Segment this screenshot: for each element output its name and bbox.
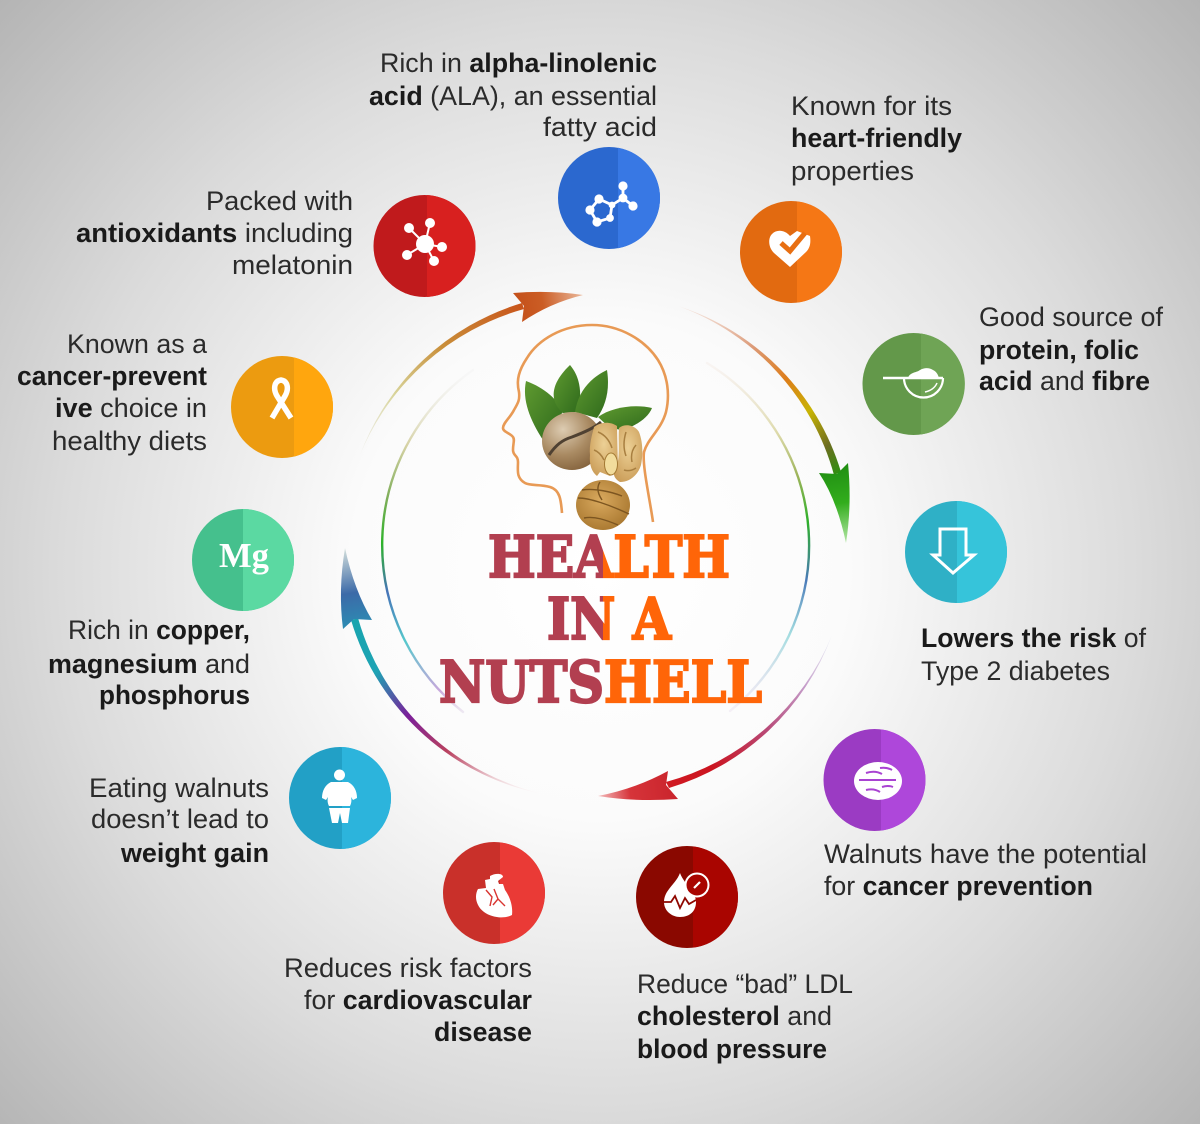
text: antioxidants [76, 186, 353, 280]
head outline [503, 325, 668, 522]
text: cardiovascular disease: for cardiovascular [304, 985, 532, 1015]
title: Health in a Nutshell [439, 524, 762, 716]
text: weight gain: weight gain [120, 838, 269, 868]
icon: walnut [824, 729, 926, 831]
cycle arrow: bottom right [598, 635, 832, 800]
icon: anatomical heart [443, 842, 545, 944]
text: type 2 diabetes [921, 623, 1146, 686]
text: type 2 diabetes: Lowers the risk of [921, 623, 1146, 653]
text: protein, folic acid and fibre [979, 302, 1163, 396]
text: copper, magnesium, phosphorus: Rich in copper, [68, 615, 250, 645]
text: cancer-preventive [17, 329, 208, 456]
text: protein, folic acid and fibre: acid and fibre [979, 366, 1150, 396]
text: alpha-linolenic acid [369, 48, 657, 142]
text: heart-friendly: Known for its [791, 91, 952, 121]
inner ring [382, 363, 809, 712]
central illustration: head with walnuts [503, 325, 668, 530]
text: cancer-preventive: healthy diets [52, 426, 207, 456]
text: copper, magnesium, phosphorus: magnesium and [48, 649, 250, 679]
text: antioxidants: Packed with [206, 186, 353, 216]
text: LDL cholesterol: cholesterol and [637, 1001, 832, 1031]
title: Health in a Nutshell: NUTSHELL [439, 649, 762, 716]
text: cancer prevention: Walnuts have the potential [824, 839, 1147, 869]
cycle arrow: top left [360, 292, 583, 455]
text: cancer prevention: for cancer prevention [824, 871, 1093, 901]
text: cardiovascular disease: disease [434, 1017, 532, 1047]
text: alpha-linolenic acid: fatty acid [543, 112, 657, 142]
whole walnut [576, 480, 630, 530]
text: type 2 diabetes: Type 2 diabetes [921, 656, 1110, 686]
icon: blood drop with gauge [636, 846, 738, 948]
icon: awareness ribbon [231, 356, 333, 458]
text: copper, magnesium, phosphorus [48, 615, 250, 710]
icon: overweight figure [289, 747, 391, 849]
icon: molecule [558, 147, 660, 249]
title: Health in a Nutshell: HEALTH [488, 524, 730, 591]
text: weight gain [89, 773, 269, 868]
text: alpha-linolenic acid: Rich in alpha-linolenic [380, 48, 657, 78]
leaves [525, 365, 652, 440]
text: heart-friendly: properties [791, 156, 914, 186]
text: heart-friendly [791, 91, 962, 186]
icon: Mg mineral: Mg [219, 536, 269, 575]
icon: heart with check [740, 201, 842, 303]
text: weight gain: doesn’t lead to [91, 804, 269, 834]
text: cancer-preventive: Known as a [67, 329, 208, 359]
text: antioxidants: melatonin [232, 250, 353, 280]
icon: Mg mineral [192, 509, 294, 611]
walnut kernel [590, 423, 642, 482]
text: protein, folic acid and fibre: protein, folic [979, 335, 1139, 365]
text: copper, magnesium, phosphorus: phosphorus [99, 680, 250, 710]
icon: scoop of powder [862, 333, 965, 435]
text: alpha-linolenic acid: acid (ALA), an essential [369, 81, 657, 111]
text: protein, folic acid and fibre: Good source of [979, 302, 1163, 332]
text: cancer-preventive: ive choice in [55, 393, 207, 423]
walnut in shell [542, 412, 602, 470]
text: heart-friendly: heart-friendly [791, 123, 962, 153]
text: cancer-preventive: cancer-prevent [17, 361, 207, 391]
text: cardiovascular disease: Reduces risk factors [284, 953, 532, 983]
icon: antioxidant cluster [374, 195, 476, 297]
text: LDL cholesterol [637, 969, 853, 1064]
text: cancer prevention [824, 839, 1147, 901]
text: LDL cholesterol: blood pressure [637, 1034, 827, 1064]
cycle arrow: top right [678, 306, 850, 543]
text: antioxidants: antioxidants including [76, 218, 353, 248]
icon: down arrow [905, 501, 1007, 603]
cycle arrow: bottom left [341, 548, 548, 795]
text: weight gain: Eating walnuts [89, 773, 269, 803]
text: LDL cholesterol: Reduce “bad” LDL [637, 969, 853, 999]
text: cardiovascular disease [284, 953, 532, 1047]
title: Health in a Nutshell: IN A [547, 586, 672, 653]
